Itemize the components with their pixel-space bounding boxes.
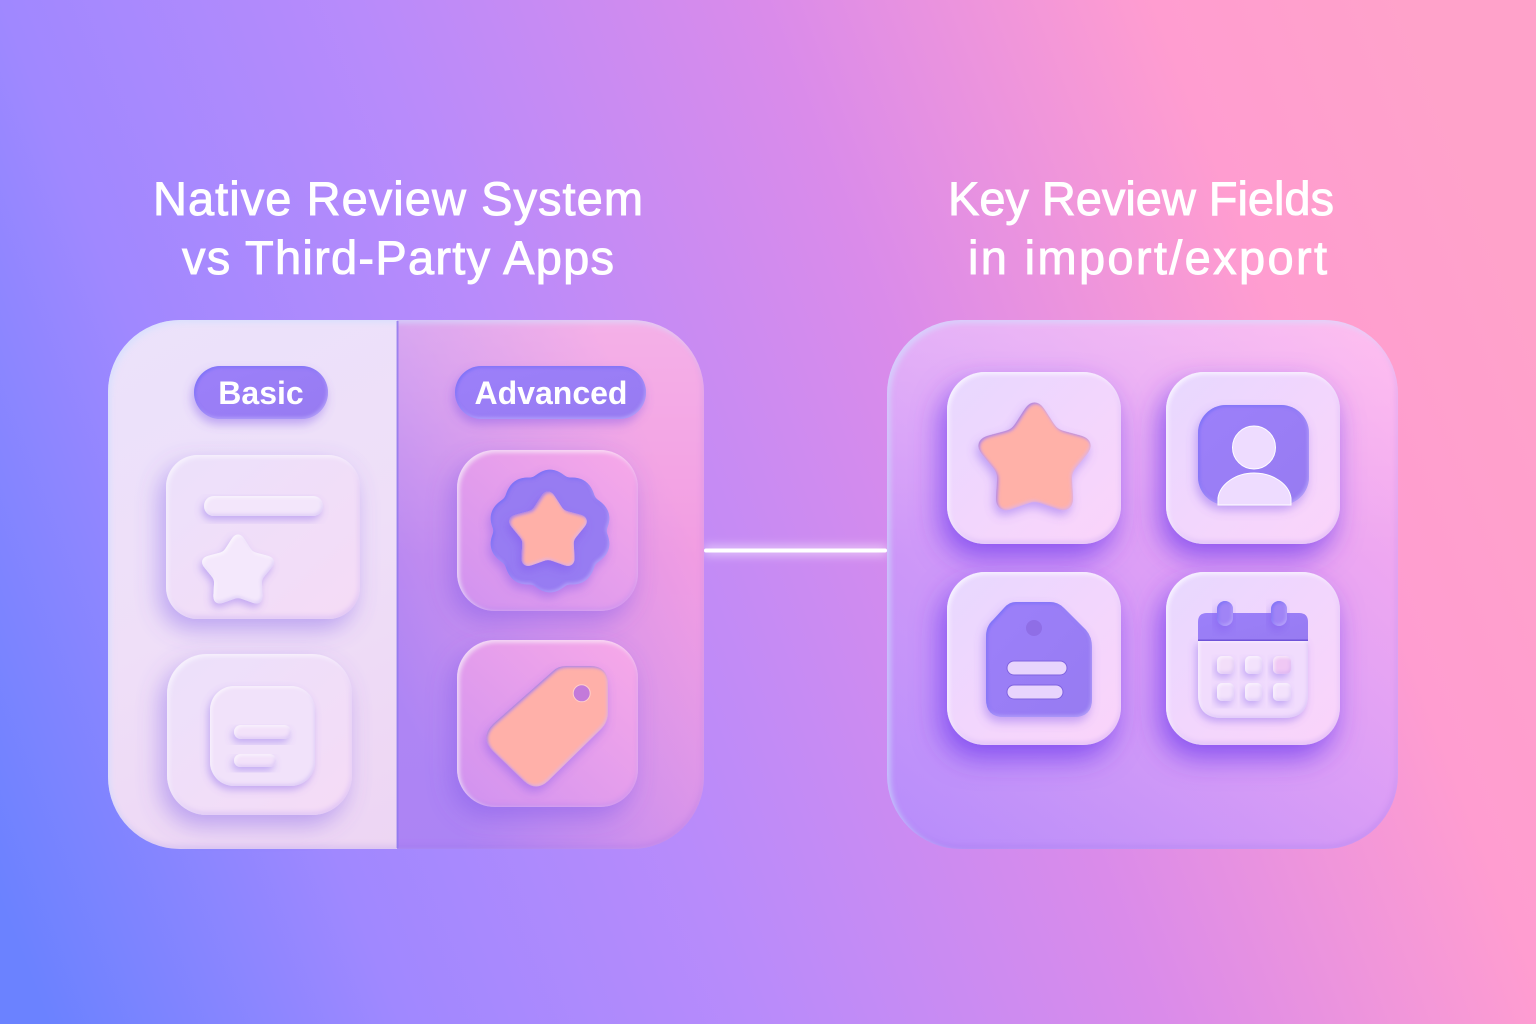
icon: star <box>987 411 1082 501</box>
icon: peach tag <box>486 666 608 786</box>
icon: badge with star <box>492 471 608 591</box>
connector line between panels <box>704 546 887 555</box>
panel: comparison of basic and advanced <box>108 320 704 849</box>
basic text line <box>204 496 323 516</box>
card: basic rating <box>166 455 360 619</box>
icon: basic star <box>208 540 268 598</box>
icon: calendar <box>1198 601 1308 718</box>
pill: Basic <box>194 366 328 419</box>
card: star rating field <box>947 372 1121 544</box>
pill: Basic: Basic <box>218 375 304 411</box>
card: advanced tag <box>457 640 638 807</box>
card: basic text review <box>167 654 352 815</box>
pill: Advanced: Advanced <box>475 375 627 411</box>
title: native review system vs third-party apps: Native Review System <box>153 172 643 225</box>
card: tag field <box>947 572 1121 745</box>
panel: key review fields <box>887 320 1398 849</box>
title: key review fields in import/export <box>948 172 1334 284</box>
card: advanced badge <box>457 450 638 611</box>
title: key review fields in import/export: Key Review Fields <box>948 172 1334 225</box>
title: native review system vs third-party apps <box>153 172 643 284</box>
title: native review system vs third-party apps: vs Third-Party Apps <box>182 231 614 284</box>
title: key review fields in import/export: in import/export <box>968 231 1327 284</box>
card: date field <box>1166 572 1340 745</box>
card: reviewer field <box>1166 372 1340 544</box>
pill: Advanced <box>455 366 646 419</box>
icon: basic document <box>210 686 315 786</box>
icon: purple tag with lines <box>986 602 1092 717</box>
icon: user profile <box>1198 405 1309 505</box>
